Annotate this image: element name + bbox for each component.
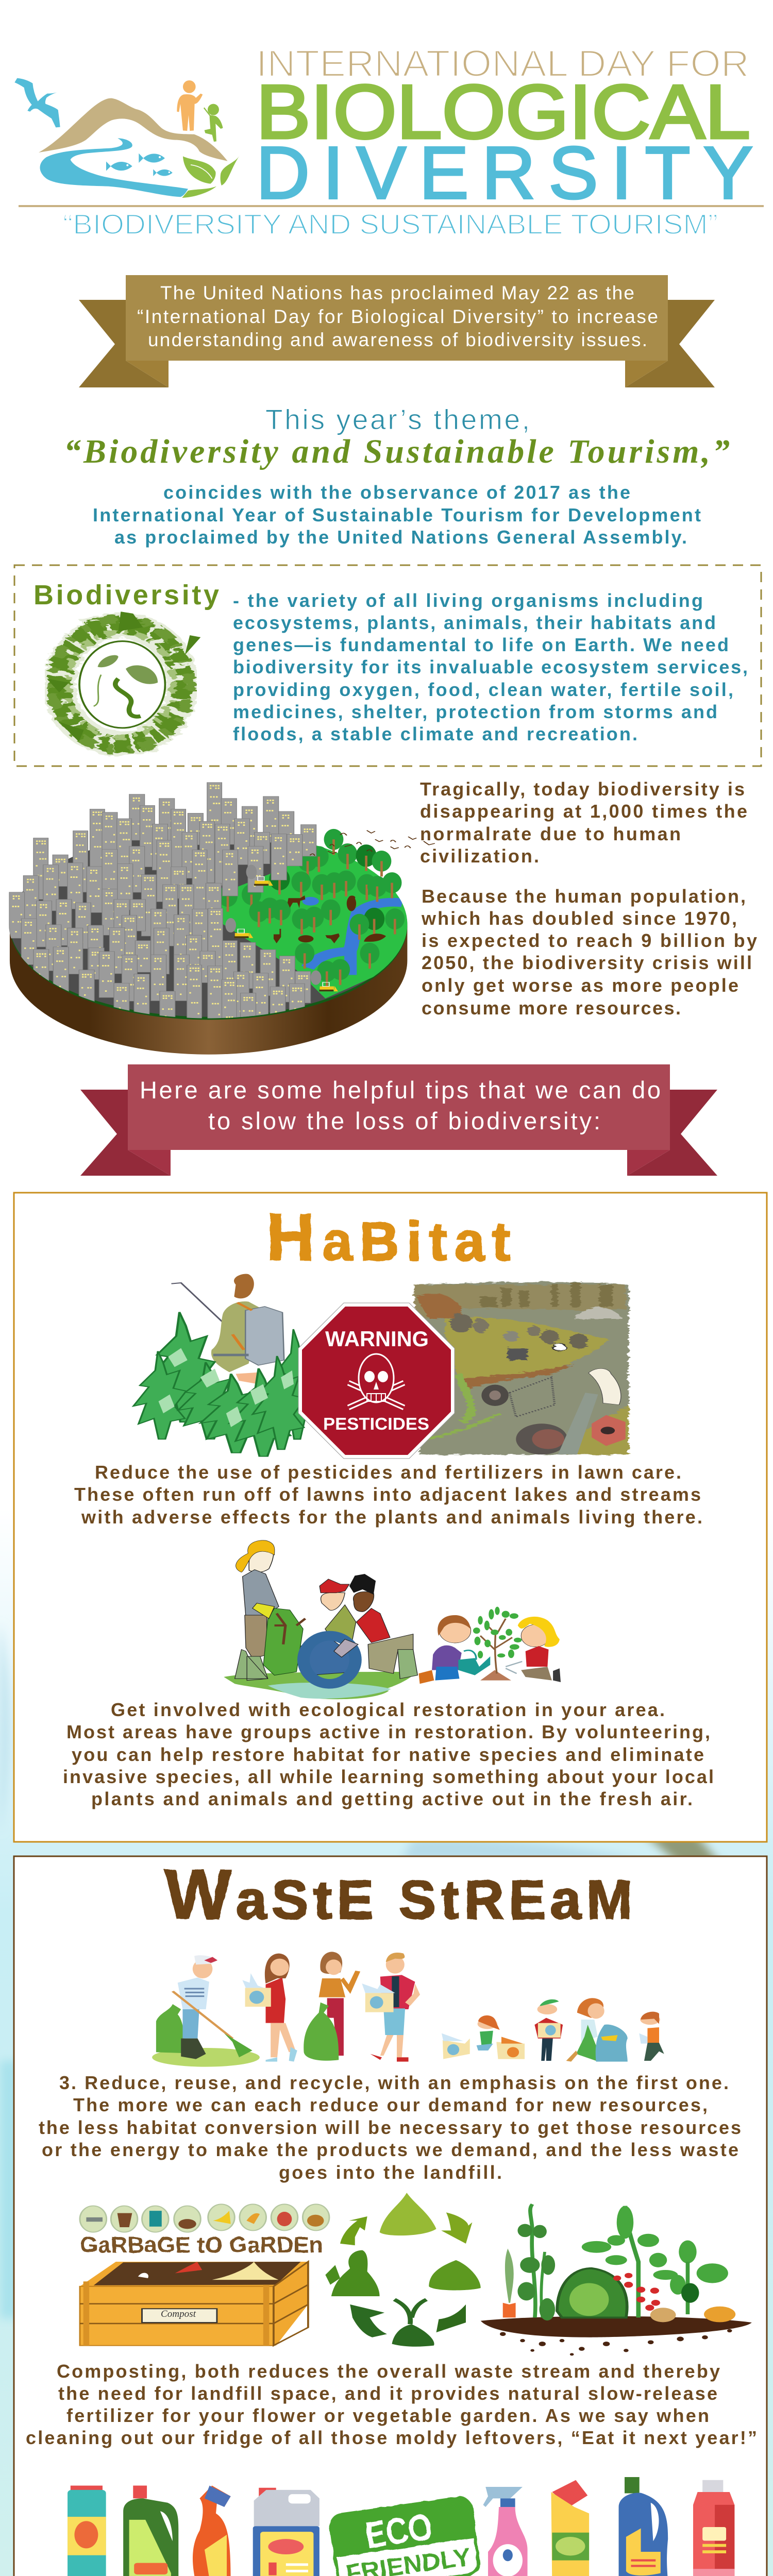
text: population growth: 2050, the biodiversity crisis will: [422, 952, 752, 973]
title underline: [19, 205, 764, 207]
text: composting: the need for landfill space, and it provides natural slow-release: [58, 2383, 717, 2404]
text: sustainable tourism year: International Year of Sustainable Tourism for Development: [93, 504, 701, 526]
icon: mountain: [39, 98, 228, 161]
text: ecological restoration: invasive species, all while learning something about your local: [63, 1766, 714, 1787]
text: population growth: which has doubled since 1970,: [421, 908, 737, 929]
definition text: providing oxygen, food, clean water, fertile soil,: [233, 679, 733, 700]
illustration: composting cycle: [325, 2193, 481, 2347]
banner: helpful tips: [80, 1064, 717, 1176]
illustration: farmer spraying corn: [133, 1274, 320, 1456]
icon: leaves: [182, 156, 240, 198]
heading: biodiversity: Biodiversity: [33, 580, 219, 611]
text: sustainable tourism year: [93, 482, 701, 548]
birds: [310, 831, 435, 856]
text: population growth: only get worse as more people: [422, 975, 738, 996]
banner text: understanding and awareness of biodiversity issues.: [148, 329, 647, 350]
panel: waste stream: [14, 1855, 767, 2576]
text: population growth: consume more resources.: [422, 997, 681, 1019]
title: International Day for: INTERNATIONAL DAY FOR: [256, 43, 749, 84]
definition text: floods, a stable climate and recreation.: [233, 723, 637, 744]
text: ecological restoration: plants and animals and getting active out in the fresh air.: [91, 1788, 693, 1809]
heading: habitat: HaBitat: [266, 1199, 510, 1275]
text: reduce pesticides: [74, 1462, 702, 1528]
illustration: cleaning bottles: [68, 2477, 734, 2576]
animals: [274, 895, 386, 943]
illustration: compost bin: [80, 2262, 308, 2346]
icon: adult figure: [177, 80, 203, 131]
illustration: polluted shore: [414, 1282, 629, 1454]
text: biodiversity disappearing: [420, 778, 747, 867]
illustration: city consuming forest on a disc: [9, 783, 435, 1055]
text: reduce pesticides: Reduce the use of pesticides and fertilizers in lawn care.: [95, 1462, 681, 1483]
icon: warning pesticides sign: [298, 1303, 455, 1459]
definition text: biodiversity for its invaluable ecosystem services,: [233, 656, 748, 677]
text: biodiversity disappearing: normalrate due to human: [420, 823, 681, 844]
text: reduce pesticides: with adverse effects for the plants and animals living there.: [81, 1506, 702, 1528]
banner text: to slow the loss of biodiversity:: [208, 1107, 600, 1134]
definition text: ecosystems, plants, animals, their habitats and: [233, 612, 716, 633]
icon: bird: [14, 78, 60, 127]
buildings: [9, 783, 316, 1041]
compost label: Compost: [161, 2309, 196, 2319]
logo illustration: [14, 78, 240, 198]
heading: theme name: “Biodiversity and Sustainable Tourism,”: [64, 433, 730, 470]
text: reduce reuse recycle: The more we can each reduce our demand for new resources,: [73, 2094, 708, 2115]
banner text: The United Nations has proclaimed May 22 as the: [160, 282, 634, 303]
text: biodiversity disappearing: civilization.: [420, 845, 539, 867]
text: composting: [26, 2361, 757, 2448]
tagline: “BIODIVERSITY AND SUSTAINABLE TOURISM”: [63, 208, 718, 240]
illustration: people recycling: [152, 1952, 664, 2067]
label: garbage to garden: GaRBaGE tO GaRDEn: [80, 2232, 323, 2258]
text: ecological restoration: Most areas have groups active in restoration. By volunteering,: [66, 1721, 710, 1742]
title: Biological: BIOLOGICAL: [256, 70, 750, 155]
definition text: medicines, shelter, protection from storms and: [233, 701, 717, 722]
stamp: eco friendly: [329, 2497, 480, 2576]
text: ecological restoration: Get involved with ecological restoration in your area.: [111, 1699, 665, 1720]
icon: child figure: [204, 104, 223, 142]
definition text: genes—is fundamental to life on Earth. We need: [233, 634, 729, 655]
illustration: volunteers restoring habitat: [224, 1540, 561, 1699]
panel: habitat: [14, 1193, 767, 1842]
icon: river: [40, 138, 188, 197]
definition text: - the variety of all living organisms including: [233, 590, 703, 611]
text: ecological restoration: [63, 1699, 714, 1809]
text: biodiversity disappearing: Tragically, today biodiversity is: [420, 778, 745, 800]
icons: compostable item badges: [80, 2204, 329, 2232]
sign text: pesticides: PESTICIDES: [323, 1414, 429, 1433]
text: sustainable tourism year: as proclaimed by the United Nations General Assembly.: [114, 527, 687, 548]
river: [308, 902, 402, 975]
text: reduce reuse recycle: or the energy to make the products we demand, and the less waste: [42, 2139, 738, 2160]
text: reduce reuse recycle: [39, 2072, 741, 2183]
text: population growth: [421, 886, 757, 1019]
icon: skull and crossbones: [348, 1354, 404, 1408]
definition text: [233, 590, 748, 744]
heading: waste stream: WaStE StREaM: [165, 1855, 632, 1934]
disc top: [10, 832, 407, 1020]
trees: [218, 829, 405, 987]
text: reduce pesticides: These often run off of lawns into adjacent lakes and streams: [74, 1484, 701, 1505]
text: reduce reuse recycle: 3. Reduce, reuse, and recycle, with an emphasis on the first one.: [59, 2072, 729, 2093]
text: ecological restoration: you can help restore habitat for native species and eliminate: [72, 1744, 704, 1765]
text: population growth: Because the human population,: [422, 886, 746, 907]
banner text: “International Day for Biological Diversity” to increase: [137, 306, 658, 327]
text: reduce reuse recycle: goes into the landfill.: [279, 2162, 502, 2183]
heading: this year's theme: This year’s theme,: [265, 403, 530, 435]
text: population growth: is expected to reach 9 billion by: [422, 930, 757, 951]
text: sustainable tourism year: coincides with the observance of 2017 as the: [163, 482, 630, 503]
text: biodiversity disappearing: disappearing at 1,000 times the: [420, 801, 747, 822]
icon: wreath of plants and animals: [47, 612, 200, 750]
title: Diversity: DIVERSITY: [256, 131, 753, 214]
banner text: [137, 282, 658, 350]
icon: fish: [106, 154, 173, 176]
banner: UN proclamation: [79, 275, 715, 387]
banner text: [140, 1076, 661, 1134]
illustration: vegetable garden: [481, 2204, 752, 2355]
text: composting: cleaning out our fridge of all those moldy leftovers, “Eat it next year!”: [26, 2427, 757, 2448]
bulldozers and smoke: [225, 865, 338, 991]
text: composting: Composting, both reduces the overall waste stream and thereby: [57, 2361, 720, 2382]
stamp word: eco: ECO: [363, 2506, 435, 2556]
text: reduce reuse recycle: the less habitat conversion will be necessary to get those resources: [39, 2117, 741, 2138]
panel: biodiversity definition: [14, 565, 761, 766]
banner text: Here are some helpful tips that we can do: [140, 1076, 661, 1104]
sign text: warning: WARNING: [325, 1327, 429, 1351]
forest ground: [222, 845, 407, 998]
disc soil side: [10, 924, 407, 1055]
text: composting: fertilizer for your flower or vegetable garden. As we say when: [66, 2405, 709, 2426]
